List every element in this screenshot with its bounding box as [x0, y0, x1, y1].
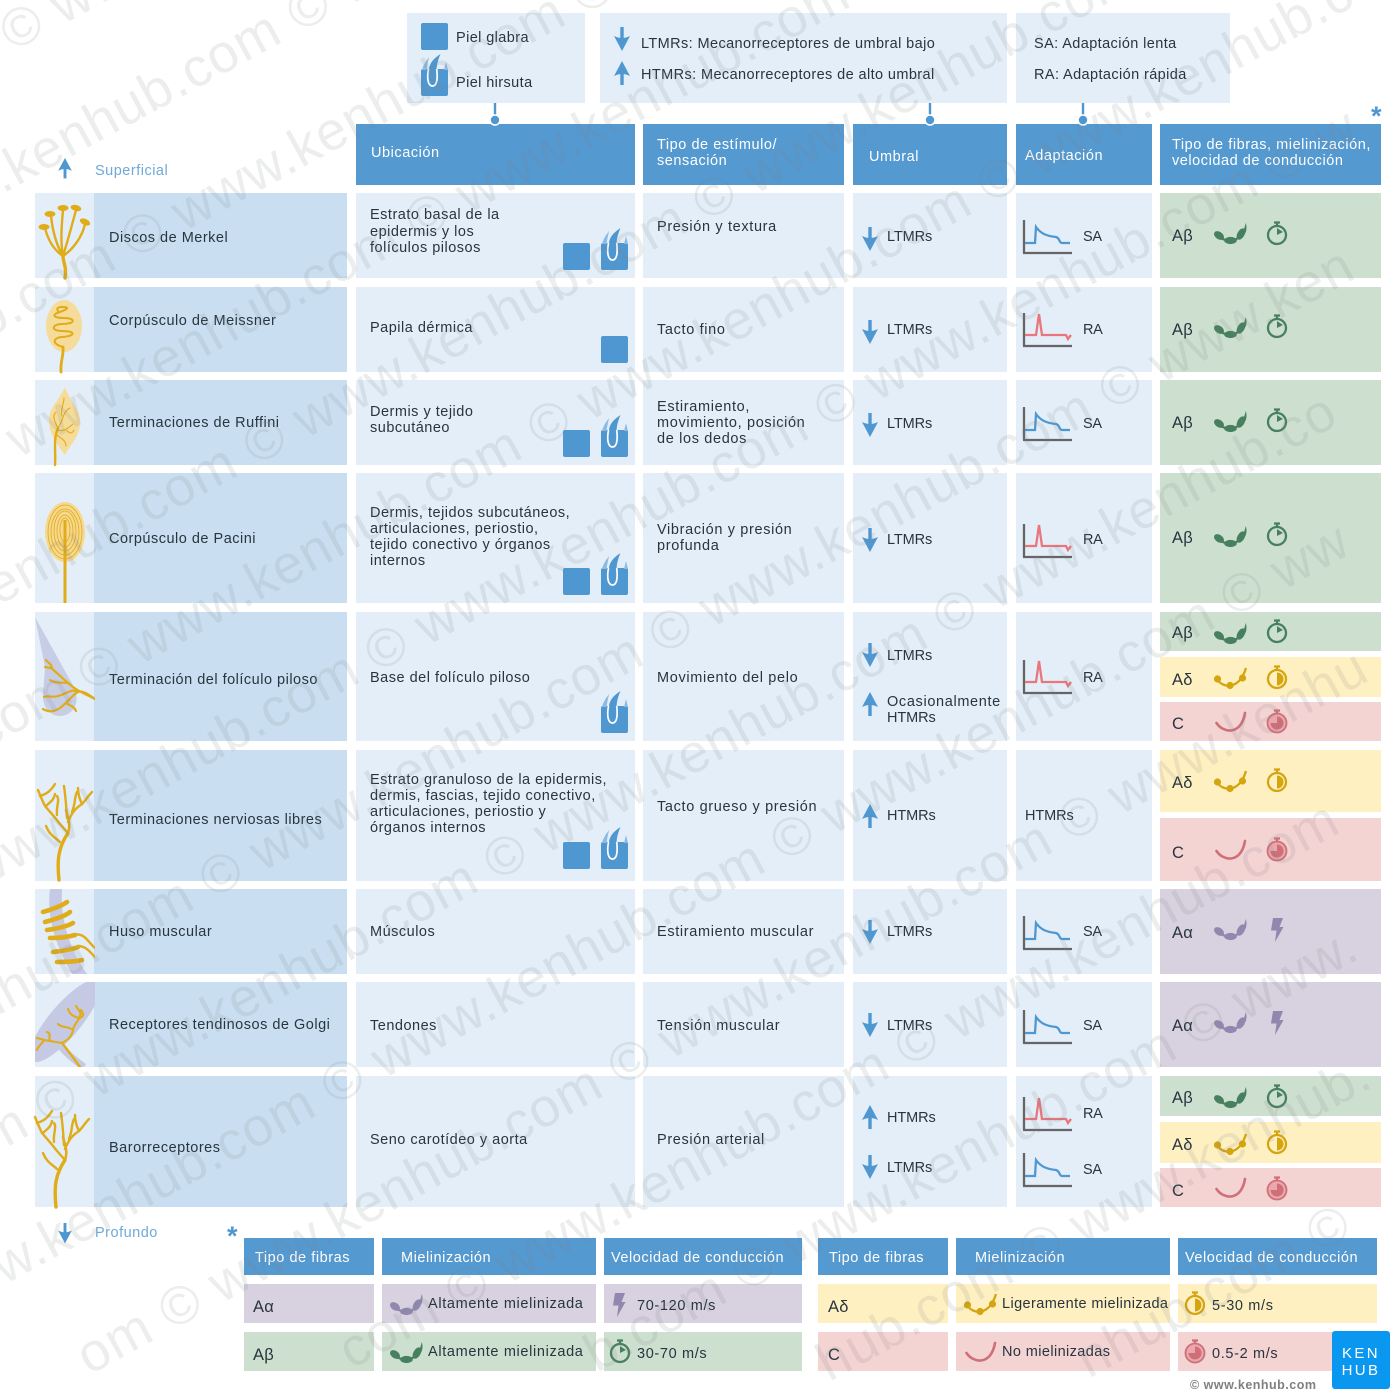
table header row: sensación	[657, 153, 727, 169]
row: Terminaciones de Ruffini: de los dedos	[657, 431, 747, 447]
row: Discos de Merkel: Discos de Merkel	[109, 230, 228, 246]
row: Terminaciones nerviosas libres: HTMRs	[887, 808, 936, 824]
row: Discos de Merkel: Presión y textura	[657, 219, 777, 235]
connector: skin legend	[490, 103, 500, 125]
row: Terminación del folículo piloso: Base del folículo piloso	[370, 670, 530, 686]
row: Corpúsculo de Meissner: Tacto fino	[657, 322, 726, 338]
row: Terminación del folículo piloso: HTMRs	[887, 710, 936, 726]
row: Corpúsculo de Meissner	[35, 287, 1381, 372]
kenhub logo: KEN	[1342, 1345, 1380, 1362]
row: Terminaciones nerviosas libres: HTMRs	[1025, 808, 1074, 824]
row: Discos de Merkel: Aβ	[1172, 227, 1193, 245]
row: Terminaciones nerviosas libres: órganos internos	[370, 820, 486, 836]
row: Corpúsculo de Pacini: internos	[370, 553, 426, 569]
row: Terminaciones de Ruffini: SA	[1083, 416, 1102, 432]
icon: up arrow	[614, 61, 630, 85]
label: HTMRs: HTMRs: Mecanorreceptores de alto umbral	[641, 67, 935, 83]
key table right: Mielinización	[975, 1250, 1065, 1266]
table header row: Tipo de estímulo/	[657, 137, 777, 153]
row: Terminaciones de Ruffini: Dermis y tejido	[370, 404, 473, 420]
row: Corpúsculo de Pacini: LTMRs	[887, 532, 932, 548]
icon: Ruffini	[49, 387, 80, 465]
row: Corpúsculo de Pacini: profunda	[657, 538, 720, 554]
row: Corpúsculo de Pacini: articulaciones, periostio,	[370, 521, 539, 537]
row: Corpúsculo de Meissner: Papila dérmica	[370, 320, 473, 336]
label: RA: RA: Adaptación rápida	[1034, 67, 1187, 83]
row: Barorreceptores: SA	[1083, 1162, 1102, 1178]
label: piel hirsuta: Piel hirsuta	[456, 75, 533, 91]
superficial indicator: Superficial	[95, 163, 168, 179]
row: Receptores tendinosos de Golgi: Tendones	[370, 1018, 437, 1034]
key table left: Aβ	[253, 1346, 274, 1364]
key table left: Altamente mielinizada	[428, 1344, 584, 1360]
row: Huso muscular: Músculos	[370, 924, 435, 940]
row: Receptores tendinosos de Golgi: SA	[1083, 1018, 1102, 1034]
copyright: © www.kenhub.com	[1190, 1378, 1316, 1392]
watermark: b.com © www.kenhub.com © www.	[574, 915, 1368, 1383]
watermark: hub.com © www.kenhub.	[806, 1043, 1381, 1393]
row: Corpúsculo de Pacini	[35, 473, 1381, 603]
key table right: Ligeramente mielinizada	[1002, 1296, 1169, 1312]
row: Terminaciones nerviosas libres	[35, 750, 1381, 881]
row: Corpúsculo de Meissner: Corpúsculo de Meissner	[109, 313, 276, 329]
row: Terminación del folículo piloso: RA	[1083, 670, 1103, 686]
watermark: nhub.com ©	[1066, 1192, 1361, 1389]
row: Discos de Merkel: Estrato basal de la	[370, 207, 500, 223]
key table right: Aδ	[828, 1298, 849, 1316]
key table left: 70-120 m/s	[637, 1298, 716, 1314]
row: Terminación del folículo piloso: Movimiento del pelo	[657, 670, 798, 686]
key table left: 30-70 m/s	[637, 1346, 707, 1362]
key table right: C	[828, 1346, 840, 1364]
table header row: velocidad de conducción	[1172, 153, 1343, 169]
row: Huso muscular: Huso muscular	[109, 924, 212, 940]
row: Barorreceptores	[35, 1076, 1381, 1207]
row: Barorreceptores: Aβ	[1172, 1089, 1193, 1107]
row: Terminaciones nerviosas libres: articulaciones, periostio y	[370, 804, 547, 820]
icon: down arrow	[614, 27, 630, 51]
icon: free nerve endings	[38, 784, 92, 880]
row: Receptores tendinosos de Golgi	[35, 982, 1381, 1067]
row: Terminación del folículo piloso: C	[1172, 715, 1184, 733]
row: Corpúsculo de Pacini: Corpúsculo de Pacini	[109, 531, 256, 547]
row: Corpúsculo de Pacini: Vibración y presión	[657, 522, 792, 538]
row: Huso muscular: Aα	[1172, 924, 1193, 942]
row: Terminaciones nerviosas libres: dermis, fascias, tejido conectivo,	[370, 788, 596, 804]
row: Terminaciones nerviosas libres: Aδ	[1172, 774, 1193, 792]
watermark: om © www.kenhub.com © www.kenhub.com © www.kenhu	[66, 637, 1378, 1386]
icon: Golgi tendon organ	[35, 982, 95, 1067]
row: Barorreceptores: HTMRs	[887, 1110, 936, 1126]
row: Corpúsculo de Pacini: Aβ	[1172, 529, 1193, 547]
watermark: com © www.kenhub.com © www.kenhub.com	[328, 789, 1349, 1380]
row: Terminación del folículo piloso: LTMRs	[887, 648, 932, 664]
row: Terminaciones de Ruffini: movimiento, posición	[657, 415, 805, 431]
row: Terminación del folículo piloso: Aβ	[1172, 624, 1193, 642]
icon: glabrous skin	[421, 23, 448, 50]
row: Terminaciones nerviosas libres: Terminaciones nerviosas libres	[109, 812, 322, 828]
row: Barorreceptores: Seno carotídeo y aorta	[370, 1132, 528, 1148]
row: Receptores tendinosos de Golgi: Tensión muscular	[657, 1018, 780, 1034]
row: Huso muscular: LTMRs	[887, 924, 932, 940]
row: Terminación del folículo piloso: Aδ	[1172, 671, 1193, 689]
row: Corpúsculo de Meissner: LTMRs	[887, 322, 932, 338]
row: Terminación del folículo piloso: Ocasionalmente	[887, 694, 1001, 710]
key table left: Altamente mielinizada	[428, 1296, 584, 1312]
row: Huso muscular	[35, 889, 1381, 974]
icon: hairy skin	[421, 54, 448, 96]
row: Receptores tendinosos de Golgi: Receptores tendinosos de Golgi	[109, 1017, 330, 1033]
row: Corpúsculo de Pacini: RA	[1083, 532, 1103, 548]
row: Terminaciones de Ruffini	[35, 380, 1381, 465]
key table right: 0.5-2 m/s	[1212, 1346, 1278, 1362]
row: Barorreceptores: Aδ	[1172, 1136, 1193, 1154]
table header row: Tipo de fibras, mielinización,	[1172, 137, 1371, 153]
row: Terminaciones de Ruffini: subcutáneo	[370, 420, 450, 436]
key table left: Mielinización	[401, 1250, 491, 1266]
row: Terminaciones de Ruffini: Terminaciones de Ruffini	[109, 415, 280, 431]
asterisk top: *	[1371, 101, 1382, 131]
asterisk bottom: *	[227, 1221, 238, 1251]
key table right: Velocidad de conducción	[1185, 1250, 1358, 1266]
label: LTMRs: LTMRs: Mecanorreceptores de umbral bajo	[641, 36, 935, 52]
superficial indicator	[58, 158, 168, 179]
table header row: Ubicación	[371, 145, 440, 161]
key table right: No mielinizadas	[1002, 1344, 1110, 1360]
key table left: Aα	[253, 1298, 274, 1316]
row: Terminaciones nerviosas libres: C	[1172, 844, 1184, 862]
kenhub logo	[1332, 1331, 1390, 1389]
row: Barorreceptores: Barorreceptores	[109, 1140, 220, 1156]
row: Terminación del folículo piloso: Terminación del folículo piloso	[109, 672, 318, 688]
table header row	[356, 124, 1381, 185]
row: Discos de Merkel: SA	[1083, 229, 1102, 245]
connector: adaptation legend	[1078, 103, 1088, 125]
icon: baroreceptor	[35, 1111, 89, 1207]
row: Discos de Merkel: LTMRs	[887, 229, 932, 245]
icon: Merkel	[38, 204, 91, 278]
row: Discos de Merkel	[35, 193, 1381, 278]
row: Terminaciones de Ruffini: Aβ	[1172, 414, 1193, 432]
key table right	[818, 1238, 1377, 1371]
row: Huso muscular: SA	[1083, 924, 1102, 940]
connector: threshold legend	[925, 103, 935, 125]
row: Terminaciones de Ruffini: LTMRs	[887, 416, 932, 432]
legend: thresholds	[600, 13, 1007, 103]
row: Barorreceptores: LTMRs	[887, 1160, 932, 1176]
table header row: Adaptación	[1025, 148, 1103, 164]
icon: Pacini	[45, 502, 85, 603]
profundo indicator	[58, 1223, 158, 1243]
row: Terminaciones nerviosas libres: Estrato granuloso de la epidermis,	[370, 772, 607, 788]
row: Receptores tendinosos de Golgi: LTMRs	[887, 1018, 932, 1034]
row: Corpúsculo de Meissner: RA	[1083, 322, 1103, 338]
key table left	[244, 1238, 802, 1371]
row: Receptores tendinosos de Golgi: Aα	[1172, 1017, 1193, 1035]
key table right: Tipo de fibras	[829, 1250, 924, 1266]
row: Corpúsculo de Pacini: Dermis, tejidos subcutáneos,	[370, 505, 570, 521]
key table left: Velocidad de conducción	[611, 1250, 784, 1266]
row: Discos de Merkel: folículos pilosos	[370, 240, 481, 256]
table header row: Umbral	[869, 149, 919, 165]
row: Terminación del folículo piloso	[35, 612, 1381, 741]
icon: hair follicle ending	[35, 617, 95, 716]
row: Corpúsculo de Pacini: tejido conectivo y órganos	[370, 537, 551, 553]
kenhub logo: HUB	[1342, 1362, 1380, 1379]
key table right: 5-30 m/s	[1212, 1298, 1274, 1314]
row: Terminaciones nerviosas libres: Tacto grueso y presión	[657, 799, 817, 815]
legend: skin types	[407, 13, 585, 103]
watermark: e	[1325, 1317, 1381, 1385]
row: Huso muscular: Estiramiento muscular	[657, 924, 814, 940]
row: Discos de Merkel: epidermis y los	[370, 224, 474, 240]
label: SA: SA: Adaptación lenta	[1034, 36, 1177, 52]
profundo indicator: Profundo	[95, 1225, 158, 1241]
row: Corpúsculo de Meissner: Aβ	[1172, 321, 1193, 339]
key table left: Tipo de fibras	[255, 1250, 350, 1266]
row: Terminaciones de Ruffini: Estiramiento,	[657, 399, 750, 415]
icon: Meissner	[46, 300, 82, 372]
row: Barorreceptores: Presión arterial	[657, 1132, 765, 1148]
label: piel glabra: Piel glabra	[456, 30, 529, 46]
row: Barorreceptores: C	[1172, 1182, 1184, 1200]
row: Barorreceptores: RA	[1083, 1106, 1103, 1122]
legend: adaptation	[1016, 13, 1230, 103]
icon: muscle spindle	[43, 889, 95, 974]
